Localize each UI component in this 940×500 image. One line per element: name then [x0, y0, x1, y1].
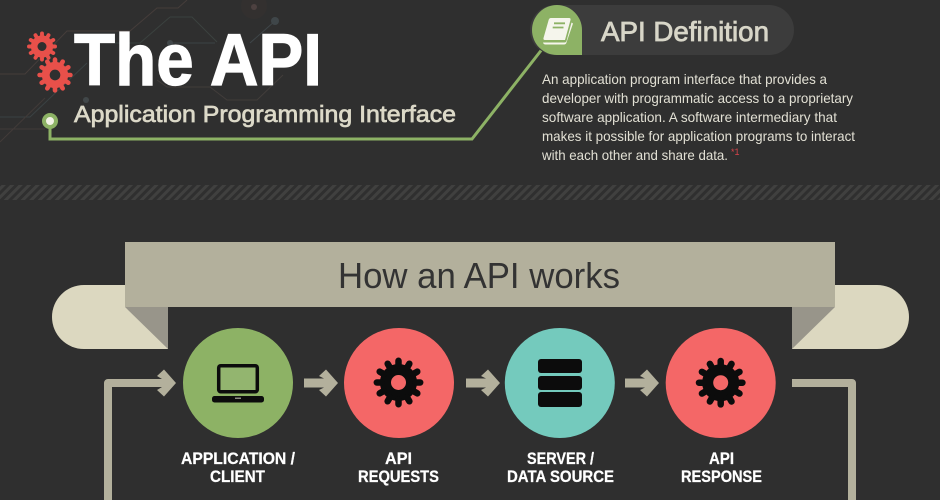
ribbon fold right: [792, 307, 835, 349]
definition text: *1: [731, 147, 740, 157]
arrow: requests to server: [466, 370, 500, 396]
definition text: [541, 71, 855, 163]
label: API: [709, 450, 734, 468]
heading text: API Definition: [601, 16, 769, 47]
ribbon banner: [52, 242, 909, 349]
step: application / client: [181, 328, 295, 486]
label: RESPONSE: [681, 468, 762, 486]
label: APPLICATION /: [181, 450, 295, 468]
arrow: response return line: [792, 383, 852, 500]
label: [181, 450, 295, 486]
label: [681, 450, 762, 486]
step: api response: [666, 328, 776, 486]
arrow: client to requests: [304, 370, 338, 396]
ribbon fold left: [125, 307, 168, 349]
subtitle: Application Programming Interface: [74, 101, 456, 127]
title: The API: [74, 20, 322, 101]
arrow: server to response: [625, 370, 659, 396]
definition text: developer with programmatic access to a proprietary: [542, 90, 853, 106]
label: API: [385, 450, 412, 468]
icon: gear: [377, 361, 420, 404]
arrow: return line into client: [108, 370, 176, 500]
heading: API Definition: [530, 5, 794, 55]
label: SERVER /: [527, 450, 594, 468]
definition text: software application. A software intermediary that: [542, 109, 837, 125]
banner heading: How an API works: [338, 255, 620, 296]
icon: gear: [699, 361, 742, 404]
label: REQUESTS: [358, 468, 439, 486]
icon: server: [538, 359, 582, 407]
definition text: with each other and share data.: [541, 147, 728, 163]
ribbon tail right: [792, 285, 909, 349]
label: DATA SOURCE: [507, 468, 614, 486]
icon: red gears: [29, 33, 70, 90]
definition text: makes it possible for application programs to interact: [542, 128, 855, 144]
ribbon tail left: [52, 285, 168, 349]
definition text: An application program interface that provides a: [542, 71, 827, 87]
green connector line: [44, 48, 543, 139]
label: CLIENT: [210, 468, 265, 486]
icon: laptop: [212, 366, 264, 402]
heading pill: [530, 5, 794, 55]
icon: book badge: [532, 5, 582, 55]
step: server / data source: [505, 328, 615, 486]
label: [507, 450, 614, 486]
label: [358, 450, 439, 486]
banner panel: [125, 242, 835, 307]
step: api requests: [344, 328, 454, 486]
